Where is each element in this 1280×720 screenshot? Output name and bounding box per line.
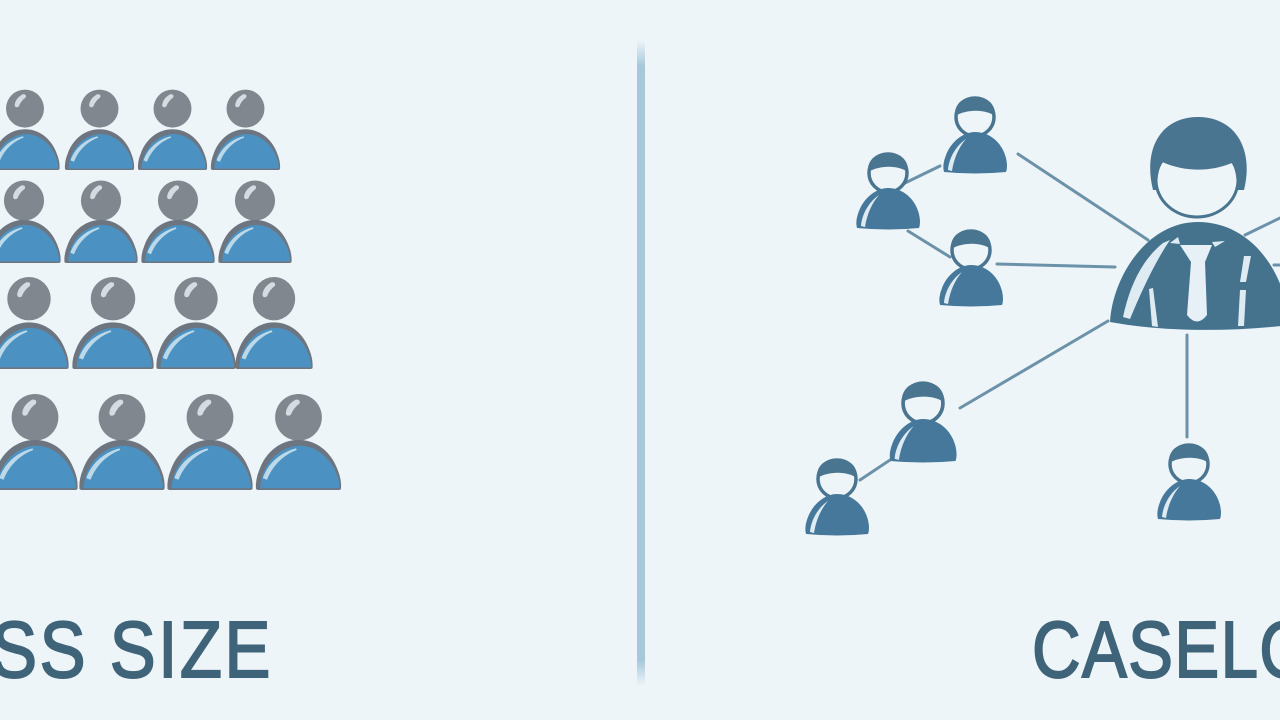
icon: client A (943, 96, 1007, 174)
panel: caseload (805, 96, 1280, 694)
icon: student grid row 4 (0, 394, 341, 490)
icon: client F (1157, 444, 1221, 520)
icon: client B (856, 152, 920, 230)
panel: class size (0, 90, 341, 694)
icon: client C (939, 230, 1003, 306)
icon: student grid row 1 (0, 90, 280, 170)
connector lines (860, 154, 1280, 480)
icon: student grid row 3 (0, 277, 313, 369)
icon: case manager (1110, 117, 1280, 330)
icon: client D (890, 382, 957, 463)
icon: student grid row 2 (0, 181, 292, 263)
icon: client E (805, 458, 869, 536)
divider (637, 40, 645, 686)
